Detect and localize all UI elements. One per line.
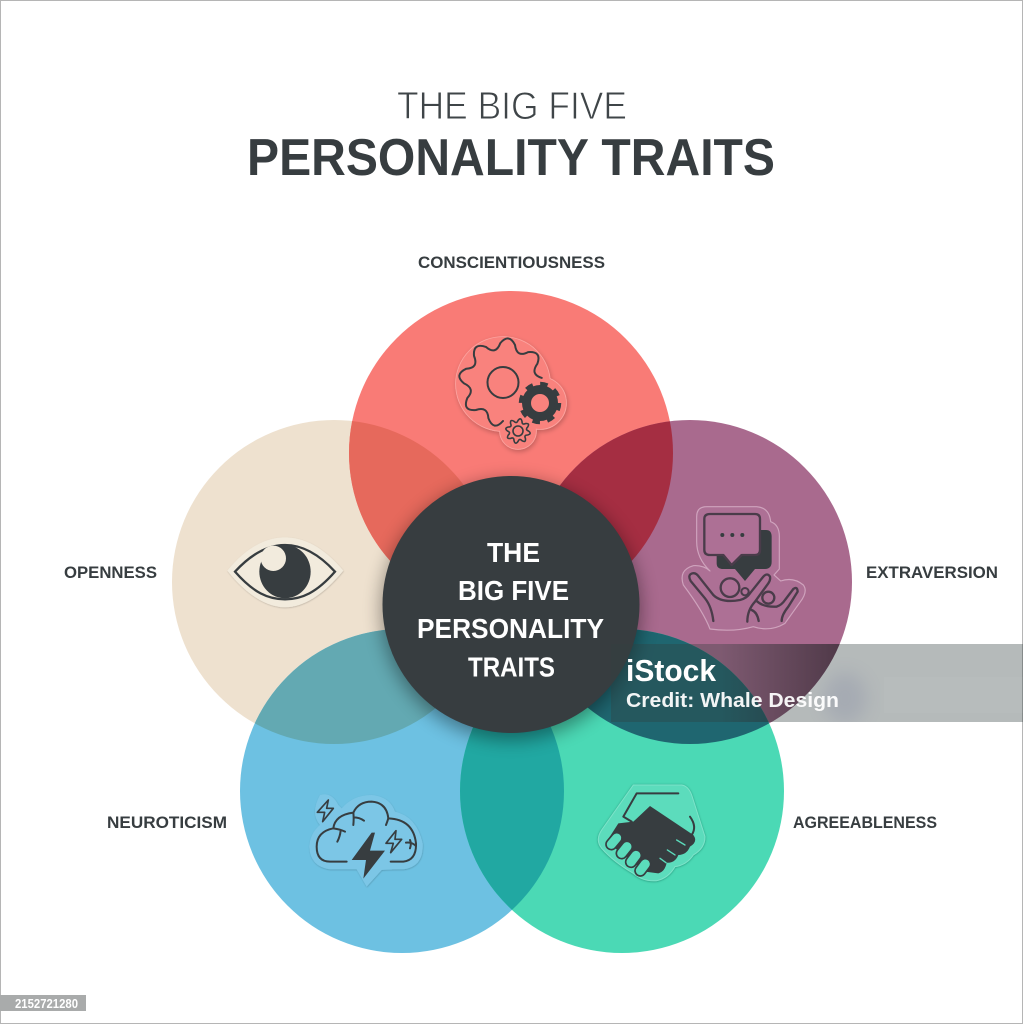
- overlap: openness and neuroticism: [254, 630, 436, 744]
- overlap: neuroticism and agreeableness: [460, 726, 564, 910]
- icon: thundercloud: [309, 794, 423, 887]
- overlap: extraversion and agreeableness: [588, 630, 770, 744]
- venn diagram circles: [172, 291, 852, 953]
- center circle shadow: [381, 480, 641, 740]
- watermark band: [611, 644, 1023, 724]
- overlap: openness and conscientiousness: [349, 421, 464, 561]
- center text: BIG FIVE: [458, 575, 569, 606]
- circle: extraversion: [528, 420, 852, 744]
- icon: eye: [227, 537, 343, 607]
- icon: gears: [456, 337, 566, 449]
- circle: agreeableness: [460, 629, 784, 953]
- watermark: istock: iStock: [626, 653, 717, 688]
- title line: personality traits: PERSONALITY TRAITS: [247, 129, 775, 187]
- center text: THE: [487, 537, 540, 568]
- center text: TRAITS: [468, 652, 555, 682]
- label: agreeableness: AGREEABLENESS: [793, 814, 937, 832]
- overlap: conscientiousness and extraversion: [560, 421, 673, 561]
- label: openness: OPENNESS: [64, 564, 157, 582]
- title: [247, 85, 775, 187]
- circle: openness: [172, 420, 496, 744]
- title line: the big five: THE BIG FIVE: [397, 85, 627, 128]
- circle: neuroticism: [240, 629, 564, 953]
- circle: conscientiousness: [349, 291, 673, 615]
- icon: speech bubbles and cheering people: [682, 507, 805, 630]
- label: extraversion: EXTRAVERSION: [866, 564, 998, 582]
- center text: [417, 537, 604, 682]
- watermark: credit: Credit: Whale Design: [626, 690, 839, 712]
- center circle: [382, 476, 640, 733]
- label: neuroticism: NEUROTICISM: [107, 814, 227, 832]
- image id tag: 2152721280: [15, 996, 78, 1011]
- icon: handshake: [598, 785, 705, 881]
- label: conscientiousness: CONSCIENTIOUSNESS: [418, 254, 605, 272]
- trait labels: [64, 254, 998, 832]
- center text: PERSONALITY: [417, 613, 604, 644]
